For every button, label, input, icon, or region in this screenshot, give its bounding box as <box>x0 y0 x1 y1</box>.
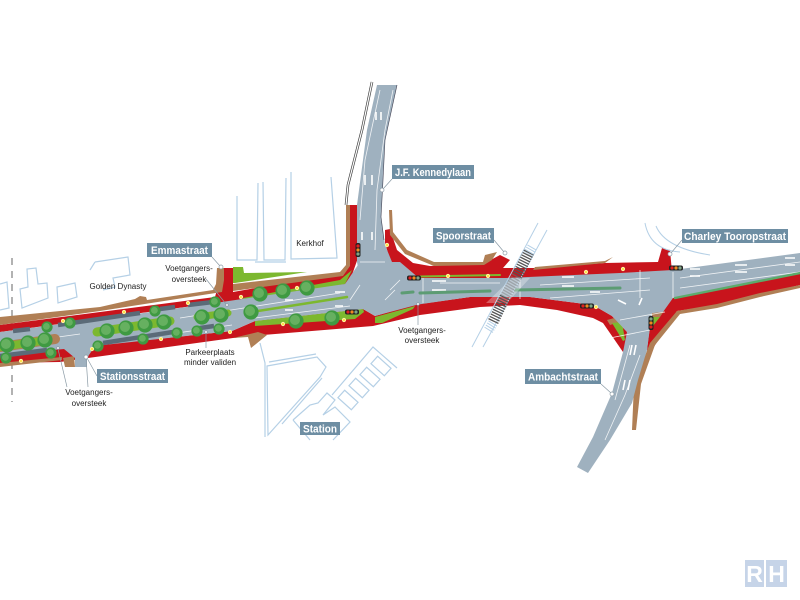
caption: disabled parking: Parkeerplaats <box>185 348 235 357</box>
caption: pedestrian crossing Emmastraat <box>165 264 228 306</box>
parking strips <box>0 302 214 356</box>
small captions <box>57 239 446 408</box>
label: Spoorstraat <box>433 228 507 255</box>
surrounding buildings outlines <box>0 172 337 310</box>
west carriageway <box>0 262 420 367</box>
J.F. Kennedylaan edge lines <box>346 82 397 240</box>
logo: RH: R <box>746 561 763 587</box>
lane arrows <box>285 112 795 390</box>
caption: disabled parking <box>184 331 236 367</box>
label: J.F. Kennedylaan: J.F. Kennedylaan <box>395 167 471 179</box>
station area outlines <box>260 343 397 440</box>
brown pavements <box>0 205 800 430</box>
east carriageway <box>415 253 800 351</box>
green planting strips <box>233 267 660 341</box>
trees <box>0 280 340 364</box>
caption: pedestrian crossing Stationsstraat <box>57 347 113 408</box>
caption: pedestrian crossing Stationsstraat: Voetgangers- <box>65 388 113 397</box>
top-left pavement <box>0 268 224 325</box>
J.F. Kennedylaan <box>357 85 420 279</box>
red cycle lanes <box>0 205 800 363</box>
caption: pedestrian crossing south: oversteek <box>405 336 440 345</box>
logo: RH: H <box>768 561 785 587</box>
railway crossing <box>472 223 547 347</box>
caption: pedestrian crossing Emmastraat: Voetgangers- <box>165 264 213 273</box>
label: Stationsstraat <box>84 355 168 383</box>
dashed project boundary line <box>11 258 13 402</box>
caption: pedestrian crossing south <box>398 303 446 345</box>
label: Emmastraat <box>147 243 223 269</box>
label: Charley Tooropstraat <box>668 229 788 256</box>
road markings <box>0 90 800 440</box>
medians <box>0 273 800 347</box>
label: Ambachtstraat: Ambachtstraat <box>528 372 598 384</box>
Charley Tooropstraat curb lines <box>645 223 710 255</box>
label: Station: Station <box>303 424 337 436</box>
logo: RH <box>745 560 787 587</box>
label: Charley Tooropstraat: Charley Tooropstraat <box>684 231 786 243</box>
caption: pedestrian crossing Stationsstraat: oversteek <box>72 399 107 408</box>
main road surface <box>0 85 800 473</box>
caption: Kerkhof: Kerkhof <box>296 239 325 248</box>
Ambachtstraat <box>577 327 650 473</box>
street lights <box>19 243 625 363</box>
label: Stationsstraat: Stationsstraat <box>100 371 165 383</box>
caption: Golden Dynasty: Golden Dynasty <box>90 282 146 291</box>
caption: disabled parking: minder validen <box>184 358 236 367</box>
caption: pedestrian crossing south: Voetgangers- <box>398 326 446 335</box>
label: Ambachtstraat <box>525 369 614 396</box>
label: Spoorstraat: Spoorstraat <box>436 230 491 242</box>
traffic island near station <box>375 306 415 323</box>
traffic lights <box>345 243 683 330</box>
label: Emmastraat: Emmastraat <box>151 245 208 257</box>
caption: pedestrian crossing Emmastraat: oversteek <box>172 275 207 284</box>
label: J.F. Kennedylaan <box>380 165 474 192</box>
